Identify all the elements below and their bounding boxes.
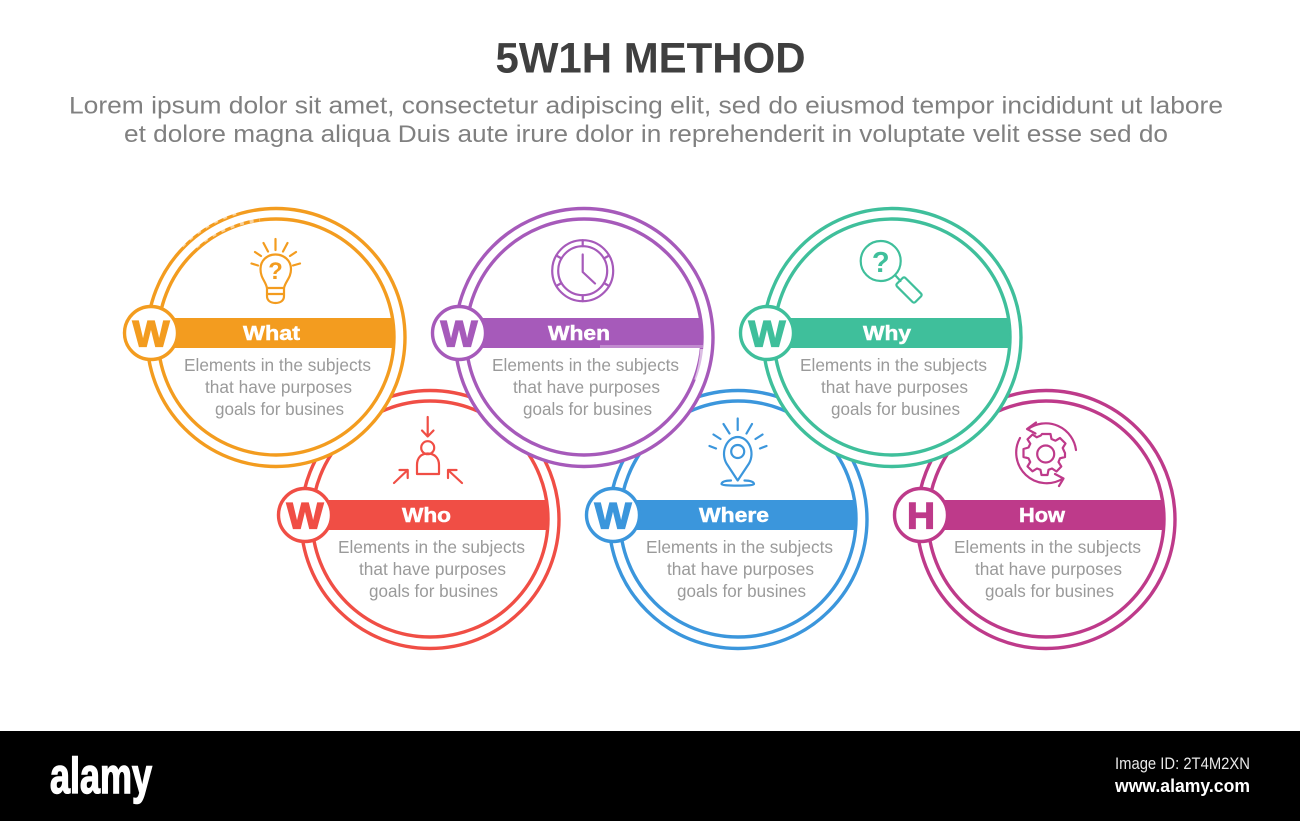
- where label: Where: [699, 505, 769, 527]
- what description: goals for busines: [215, 399, 344, 419]
- who description: goals for busines: [369, 581, 498, 601]
- who description: Elements in the subjects: [338, 537, 525, 557]
- what description: [184, 355, 371, 419]
- what description: Elements in the subjects: [184, 355, 371, 375]
- why badge: W: [748, 314, 786, 354]
- panel: what: [124, 208, 405, 466]
- how description: that have purposes: [975, 559, 1122, 579]
- what badge: W: [132, 314, 170, 354]
- how description: Elements in the subjects: [954, 537, 1141, 557]
- image id: Image ID: 2T4M2XN: [1115, 754, 1250, 773]
- why header bar: [772, 318, 1010, 348]
- icon: magnifier with question: ?: [872, 247, 890, 279]
- how label: How: [1019, 505, 1065, 527]
- website: www.alamy.com: [1114, 776, 1250, 796]
- when description: [492, 355, 679, 419]
- who header bar: [310, 500, 548, 530]
- who label: Who: [402, 505, 451, 527]
- when description: that have purposes: [513, 377, 660, 397]
- where description: that have purposes: [667, 559, 814, 579]
- when badge: [432, 306, 486, 360]
- panel: why: [740, 208, 1021, 466]
- why description: that have purposes: [821, 377, 968, 397]
- why description: Elements in the subjects: [800, 355, 987, 375]
- where badge: [586, 488, 640, 542]
- subtitle text: Lorem ipsum dolor sit amet, consectetur adipiscing elit, sed do eiusmod tempor incididunt ut labore: [69, 92, 1223, 120]
- what description: that have purposes: [205, 377, 352, 397]
- when label: When: [548, 323, 610, 345]
- when badge: W: [440, 314, 478, 354]
- who description: [338, 537, 525, 601]
- icon: magnifier with question: [861, 241, 922, 303]
- how badge: H: [907, 496, 935, 536]
- panel: who: [278, 390, 559, 648]
- where description: [646, 537, 833, 601]
- where header bar: [618, 500, 856, 530]
- when header bar: [464, 318, 702, 348]
- why description: [800, 355, 987, 419]
- footer bar: [0, 731, 1300, 821]
- title: 5W1H METHOD: [496, 36, 806, 82]
- who badge: W: [286, 496, 324, 536]
- what label: What: [243, 323, 300, 345]
- panel: how: [894, 390, 1175, 648]
- why label: Why: [863, 323, 912, 345]
- icon: gear with cycle arrows: [1016, 422, 1076, 486]
- subtitle text: et dolore magna aliqua Duis aute irure dolor in reprehenderit in voluptate velit esse sed do: [124, 121, 1168, 148]
- what header bar: [156, 318, 394, 348]
- panel: when: [432, 208, 713, 466]
- when description: goals for busines: [523, 399, 652, 419]
- how badge: [894, 488, 948, 542]
- panel: where: [586, 390, 867, 648]
- what badge: [124, 306, 178, 360]
- subtitle text: [69, 92, 1223, 148]
- icon: person with arrows: [394, 417, 462, 483]
- icon: light bulb with question: [252, 239, 300, 303]
- where description: Elements in the subjects: [646, 537, 833, 557]
- alamy logo: alamy: [50, 748, 152, 804]
- icon: location pin: [710, 418, 766, 486]
- why badge: [740, 306, 794, 360]
- where description: goals for busines: [677, 581, 806, 601]
- icon: clock: [552, 240, 613, 301]
- how description: [954, 537, 1141, 601]
- icon: light bulb with question: ?: [268, 258, 283, 285]
- how description: goals for busines: [985, 581, 1114, 601]
- when description: Elements in the subjects: [492, 355, 679, 375]
- where badge: W: [594, 496, 632, 536]
- how header bar: [926, 500, 1164, 530]
- why description: goals for busines: [831, 399, 960, 419]
- who description: that have purposes: [359, 559, 506, 579]
- who badge: [278, 488, 332, 542]
